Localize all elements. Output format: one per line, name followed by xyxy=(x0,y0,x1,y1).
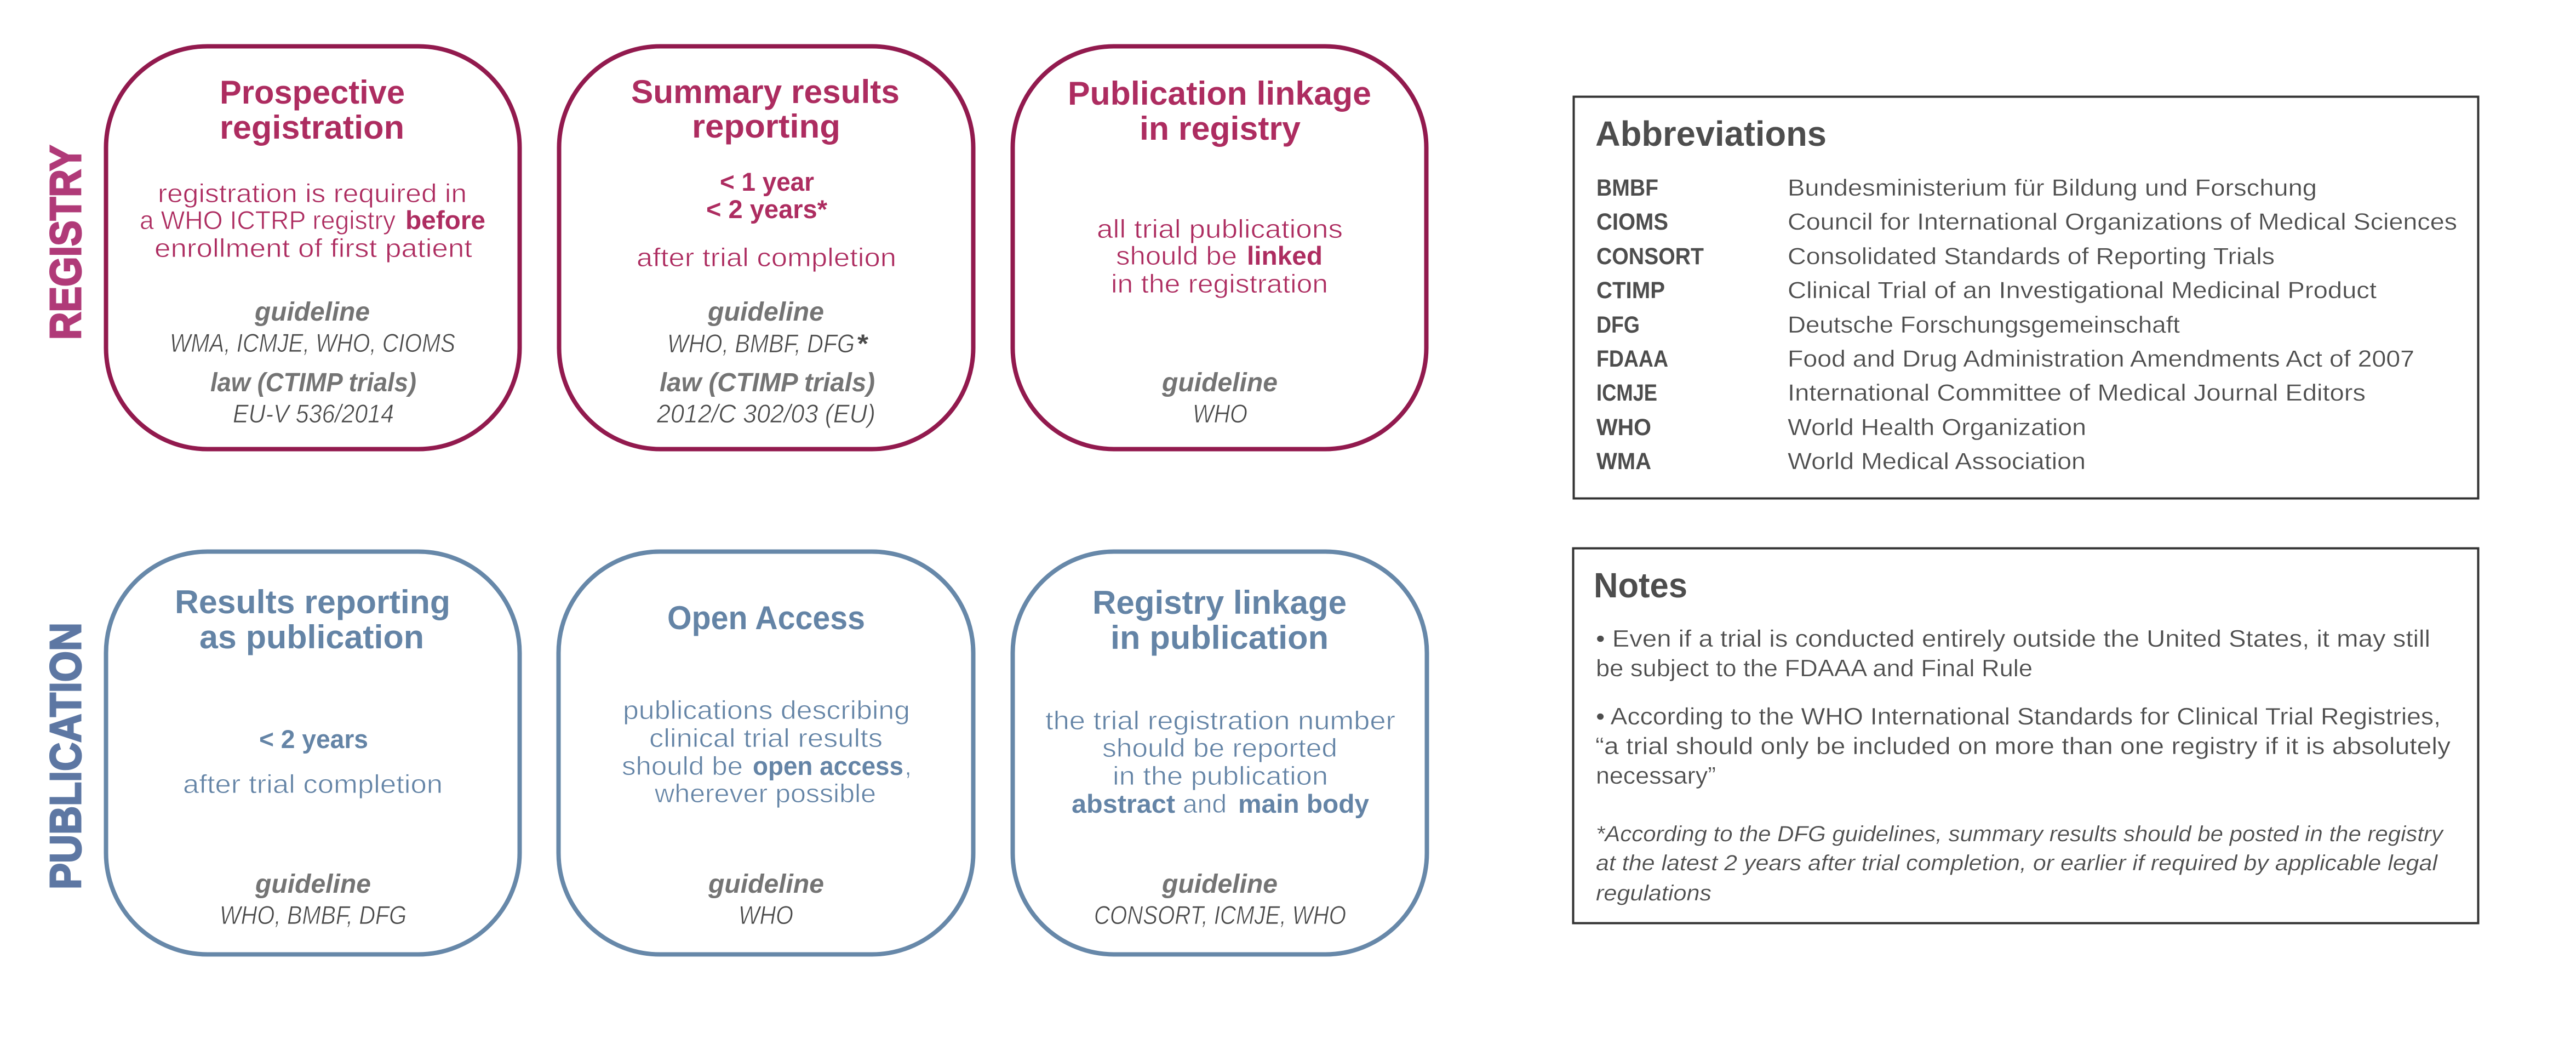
heading: Results reporting as publication xyxy=(175,584,450,655)
heading: Summary results reporting: reporting xyxy=(692,108,840,145)
abbreviation: ICMJE xyxy=(1596,380,2366,406)
text block: publication deadline xyxy=(183,724,443,798)
heading: Publication linkage in registry: Publication linkage xyxy=(1068,75,1371,112)
footnote: DFG guidelines: at the latest 2 years after trial completion, or earlier if required by applicable legal xyxy=(1596,851,2438,875)
heading: Open Access: Open Access xyxy=(667,600,865,636)
side label: REGISTRY: REGISTRY xyxy=(41,145,90,340)
text block: registration number requirement: abstract xyxy=(1072,789,1175,818)
text block: registration requirement: before xyxy=(405,206,485,235)
text block: guideline and law sources: 2012/C 302/03 (EU) xyxy=(656,399,875,428)
text block: guideline source xyxy=(220,870,407,929)
note: FDAAA applicability: be subject to the FDAAA and Final Rule xyxy=(1596,655,2033,682)
abbreviation: WHO: WHO xyxy=(1596,414,1651,441)
text block: reporting deadlines: after trial completion xyxy=(637,243,896,272)
text block: registration number requirement: main body xyxy=(1238,789,1369,818)
panel: Prospective registration xyxy=(106,46,519,449)
text block: registration requirement xyxy=(140,179,485,263)
text block: linkage requirement: linked xyxy=(1247,241,1323,270)
text block: publication deadline: after trial completion xyxy=(183,769,443,798)
text block: guideline source: guideline xyxy=(255,870,371,899)
heading: Prospective registration: Prospective xyxy=(220,74,405,111)
text block: reporting deadlines: < 2 years* xyxy=(706,195,828,224)
text block: guideline source: guideline xyxy=(1161,870,1278,899)
text block: open access requirement: , xyxy=(905,751,912,780)
text block: guideline and law sources: WHO, BMBF, DFG xyxy=(667,329,855,358)
text block: registration number requirement xyxy=(1045,706,1395,818)
footnote: DFG guidelines: *According to the DFG guidelines, summary results should be posted in the registry xyxy=(1596,822,2445,846)
text block: linkage requirement: should be xyxy=(1116,241,1237,270)
note: WHO registry standards: • According to the WHO International Standards for Clinical Trial Registries, xyxy=(1596,703,2441,730)
text block: guideline source xyxy=(708,870,824,929)
panel: Results reporting as publication xyxy=(106,551,519,955)
abbreviation: FDAAA: Food and Drug Administration Amendments Act of 2007 xyxy=(1788,346,2414,372)
text block: registration number requirement: should be reported xyxy=(1102,733,1337,762)
heading: Results reporting as publication: Results reporting xyxy=(175,584,450,620)
text block: registration number requirement: in the publication xyxy=(1113,761,1328,790)
abbreviation: CIOMS: CIOMS xyxy=(1596,209,1668,235)
abbreviation: CTIMP: Clinical Trial of an Investigational Medicinal Product xyxy=(1788,277,2377,304)
abbreviation: CONSORT xyxy=(1596,243,2275,270)
text block: registration requirement: a WHO ICTRP registry xyxy=(140,206,396,235)
panel: Summary results reporting xyxy=(559,46,973,449)
abbreviation: BMBF xyxy=(1596,175,2317,201)
text block: reporting deadlines: < 1 year xyxy=(720,167,814,196)
text block: guideline and law sources: law (CTIMP trials) xyxy=(660,368,875,397)
abbreviation: WMA: WMA xyxy=(1596,448,1651,475)
text block: guideline and law sources: * xyxy=(856,329,869,358)
abbreviation: ICMJE: International Committee of Medical Journal Editors xyxy=(1788,380,2366,406)
text block: guideline and law sources: guideline xyxy=(254,298,370,327)
heading: Publication linkage in registry xyxy=(1068,75,1371,147)
heading: Summary results reporting xyxy=(631,73,900,145)
text block: linkage requirement xyxy=(1097,214,1343,298)
note: FDAAA applicability: • Even if a trial is conducted entirely outside the United States, it may still xyxy=(1596,625,2430,652)
abbreviation: WMA: World Medical Association xyxy=(1788,448,2086,475)
text block: guideline and law sources xyxy=(170,298,455,428)
abbreviation: FDAAA: FDAAA xyxy=(1596,346,1668,372)
heading: Prospective registration xyxy=(220,74,405,146)
abbreviation: WHO: World Health Organization xyxy=(1788,414,2086,441)
text block: open access requirement: clinical trial results xyxy=(649,723,883,752)
text block: guideline and law sources: WMA, ICMJE, WHO, CIOMS xyxy=(170,328,455,357)
footnote: DFG guidelines: regulations xyxy=(1596,881,1711,905)
text block: guideline source: WHO xyxy=(739,900,793,929)
abbreviation: BMBF: Bundesministerium für Bildung und Forschung xyxy=(1788,175,2317,201)
note: WHO registry standards: necessary” xyxy=(1596,762,1716,789)
heading: Registry linkage in publication: Registry linkage xyxy=(1092,584,1347,621)
abbreviation: CIOMS: Council for International Organizations of Medical Sciences xyxy=(1788,209,2457,235)
panel: Open Access xyxy=(559,551,973,955)
abbreviation: CTIMP xyxy=(1596,277,2377,304)
footnote: DFG guidelines xyxy=(1596,822,2445,905)
text block: guideline and law sources: guideline xyxy=(707,298,824,327)
heading: Prospective registration: registration xyxy=(220,109,404,146)
note: WHO registry standards: “a trial should only be included on more than one registry if it is absolutely xyxy=(1595,733,2451,760)
text block: registration number requirement: and xyxy=(1183,789,1227,818)
abbreviation: CONSORT: CONSORT xyxy=(1596,243,1704,270)
abbreviation: CTIMP: CTIMP xyxy=(1596,277,1665,304)
text block: guideline and law sources xyxy=(656,298,875,428)
text block: guideline and law sources: EU-V 536/2014 xyxy=(233,399,394,428)
panel: Registry linkage in publication xyxy=(1012,551,1427,955)
text block: open access requirement: should be xyxy=(622,751,743,780)
heading: Results reporting as publication: as publication xyxy=(199,619,424,655)
heading: Abbreviations: Abbreviations xyxy=(1595,114,1827,153)
heading: Registry linkage in publication: in publication xyxy=(1110,619,1329,656)
text block: guideline and law sources: law (CTIMP trials) xyxy=(210,368,416,397)
panel: Publication linkage in registry xyxy=(1012,46,1427,449)
abbreviation: ICMJE: ICMJE xyxy=(1596,380,1657,406)
text block: guideline source: WHO, BMBF, DFG xyxy=(220,900,407,929)
text block: guideline source: WHO xyxy=(1193,399,1247,428)
text block: guideline source: guideline xyxy=(1161,368,1278,397)
text block: linkage requirement: all trial publications xyxy=(1097,214,1343,243)
panel: Notes xyxy=(1573,548,2478,923)
note: WHO registry standards xyxy=(1595,703,2451,789)
text block: guideline source: CONSORT, ICMJE, WHO xyxy=(1094,900,1346,929)
text block: reporting deadlines xyxy=(637,167,896,272)
text block: registration number requirement: the trial registration number xyxy=(1045,706,1395,735)
heading: Notes: Notes xyxy=(1594,566,1687,605)
abbreviation: WHO xyxy=(1596,414,2086,441)
abbreviation: BMBF: BMBF xyxy=(1596,175,1658,201)
text block: open access requirement xyxy=(622,695,912,808)
abbreviation: DFG: Deutsche Forschungsgemeinschaft xyxy=(1788,312,2180,338)
text block: registration requirement: registration is required in xyxy=(158,179,467,208)
text block: open access requirement: publications describing xyxy=(623,695,910,724)
abbreviation: CONSORT: Consolidated Standards of Reporting Trials xyxy=(1788,243,2275,270)
text block: open access requirement: open access xyxy=(753,751,903,780)
text block: guideline source: guideline xyxy=(708,870,824,899)
text block: linkage requirement: in the registration xyxy=(1111,269,1328,298)
panel: Abbreviations xyxy=(1573,96,2478,499)
text block: publication deadline: < 2 years xyxy=(259,724,368,754)
abbreviation: DFG: DFG xyxy=(1596,312,1640,338)
text block: open access requirement: wherever possible xyxy=(654,779,876,808)
text block: guideline source xyxy=(1161,368,1278,428)
note: FDAAA applicability xyxy=(1596,625,2430,682)
heading: Publication linkage in registry: in registry xyxy=(1140,110,1301,147)
heading: Registry linkage in publication xyxy=(1092,584,1347,656)
heading: Summary results reporting: Summary results xyxy=(631,73,900,110)
side label: PUBLICATION: PUBLICATION xyxy=(41,623,90,889)
text block: guideline source xyxy=(1094,870,1346,929)
abbreviation: DFG xyxy=(1596,312,2180,338)
abbreviation: WMA xyxy=(1596,448,2086,475)
text block: registration requirement: enrollment of first patient xyxy=(154,233,472,263)
